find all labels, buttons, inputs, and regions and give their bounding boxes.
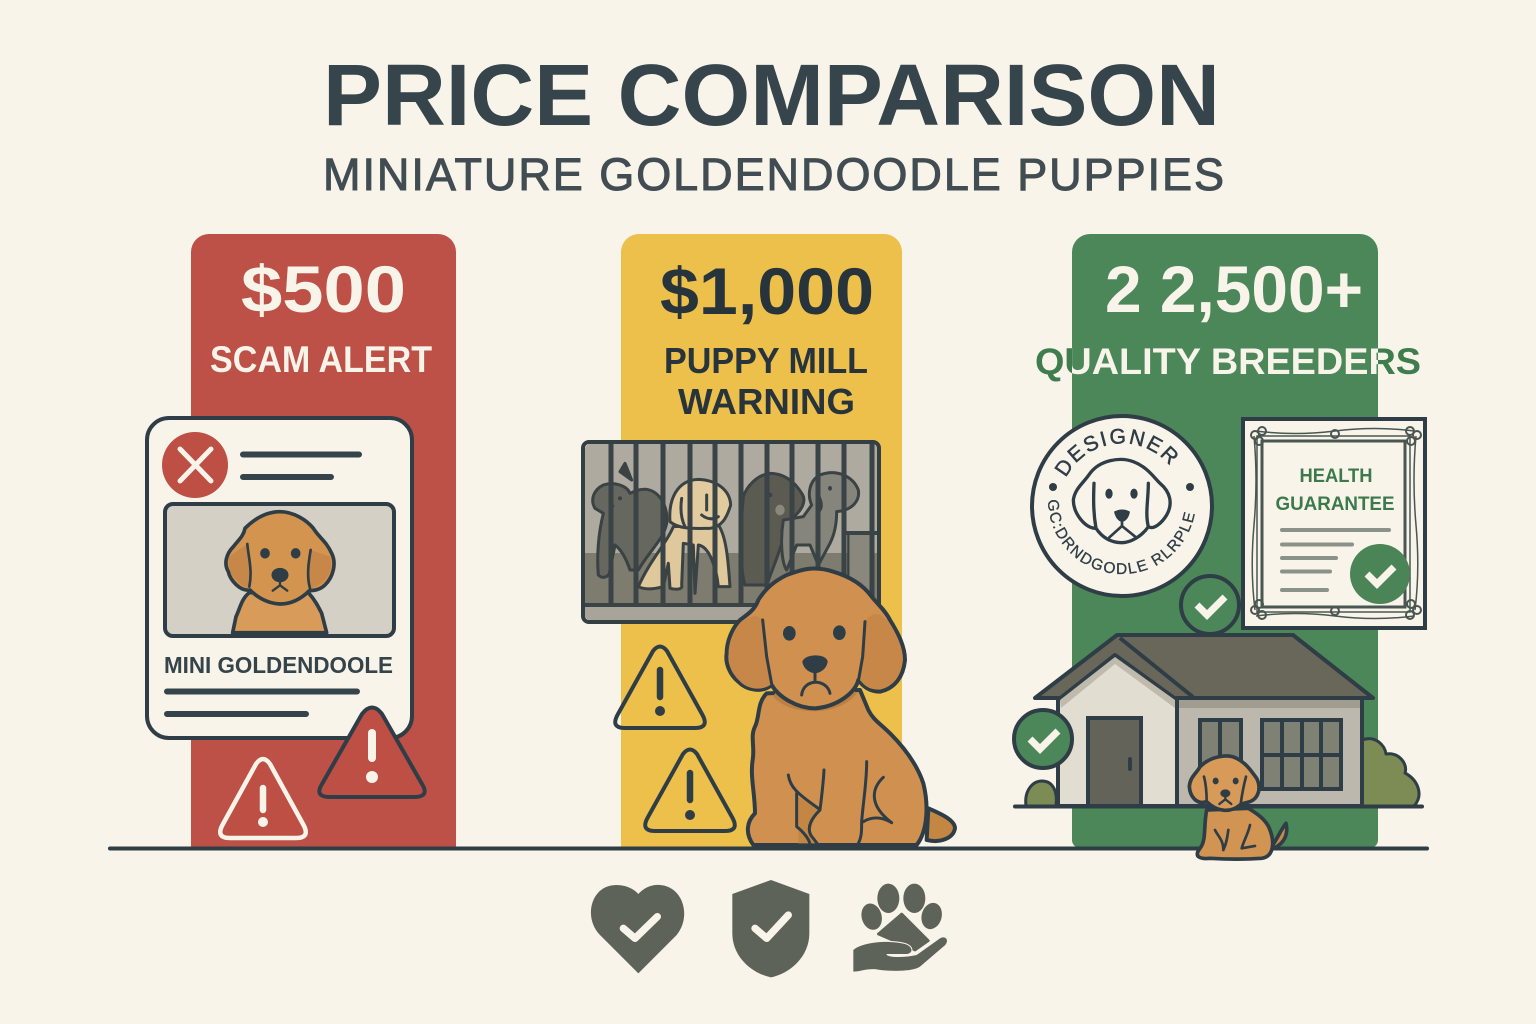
icon: heart check	[591, 885, 684, 973]
panel: puppy mill warning	[583, 234, 902, 848]
price: $1,000: $1,000	[660, 254, 874, 328]
listing card	[147, 418, 412, 738]
certificate text: HEALTH	[1300, 465, 1372, 487]
body	[1197, 808, 1273, 859]
icon: warning triangle dark	[319, 708, 425, 797]
title: PRICE COMPARISON	[323, 47, 1220, 144]
cage with puppies	[583, 442, 879, 622]
window right	[1262, 720, 1341, 789]
tail	[927, 808, 955, 841]
roof	[1035, 635, 1373, 698]
label: quality breeders: QUALITY BREEDERS	[1035, 341, 1421, 382]
price: 2 2,500+: 2 2,500+	[1105, 252, 1363, 326]
body	[748, 690, 927, 845]
certificate: health guarantee	[1243, 419, 1425, 628]
badge: designer goldendoodle	[1030, 414, 1214, 598]
label: puppy mill warning: WARNING	[678, 381, 855, 422]
front gable wall	[1058, 655, 1177, 806]
icon: red x	[162, 432, 228, 498]
panel: scam alert	[147, 234, 456, 848]
house	[1015, 635, 1422, 806]
price: $500: $500	[241, 252, 406, 326]
icon: check circle roof	[1181, 576, 1239, 634]
icon: check seal	[1350, 544, 1410, 604]
label: puppy mill warning: PUPPY MILL	[664, 340, 868, 381]
head and ears	[726, 568, 905, 708]
listing name: MINI GOLDENDOOLE	[164, 652, 393, 678]
icon: paw in hand	[853, 884, 947, 972]
ornamental frame	[1251, 427, 1421, 619]
certificate text: GUARANTEE	[1276, 493, 1394, 515]
icon: warning triangle 2	[645, 750, 735, 831]
head	[1189, 756, 1259, 810]
icon: shield check	[732, 880, 809, 977]
subtitle: MINIATURE GOLDENDOODLE PUPPIES	[323, 149, 1224, 200]
tail	[1272, 823, 1287, 848]
big sad puppy	[726, 568, 955, 845]
icon: warning triangle white	[220, 759, 306, 838]
ground line	[110, 846, 1427, 850]
legs	[788, 762, 892, 845]
label: puppy mill warning	[664, 340, 868, 422]
badge: designer goldendoodle: DESIGNER	[1054, 428, 1178, 477]
door	[1088, 718, 1141, 806]
label: quality breeders: QUALITY BREEDERS	[1035, 341, 1421, 382]
small puppy	[1189, 756, 1287, 859]
bushes	[1026, 739, 1419, 806]
icon: dog face	[1073, 459, 1170, 543]
icon: warning triangle 1	[615, 646, 705, 728]
icon: check circle house	[1014, 710, 1072, 768]
panel: quality breeders	[1012, 234, 1427, 846]
puppy photo	[165, 504, 394, 636]
badge: designer goldendoodle: GC:DRNDGODLE RLRPLE	[1048, 500, 1195, 574]
certificate text	[1276, 465, 1394, 515]
label: scam alert: SCAM ALERT	[210, 339, 432, 380]
icon row	[591, 880, 947, 977]
window left	[1200, 720, 1241, 780]
